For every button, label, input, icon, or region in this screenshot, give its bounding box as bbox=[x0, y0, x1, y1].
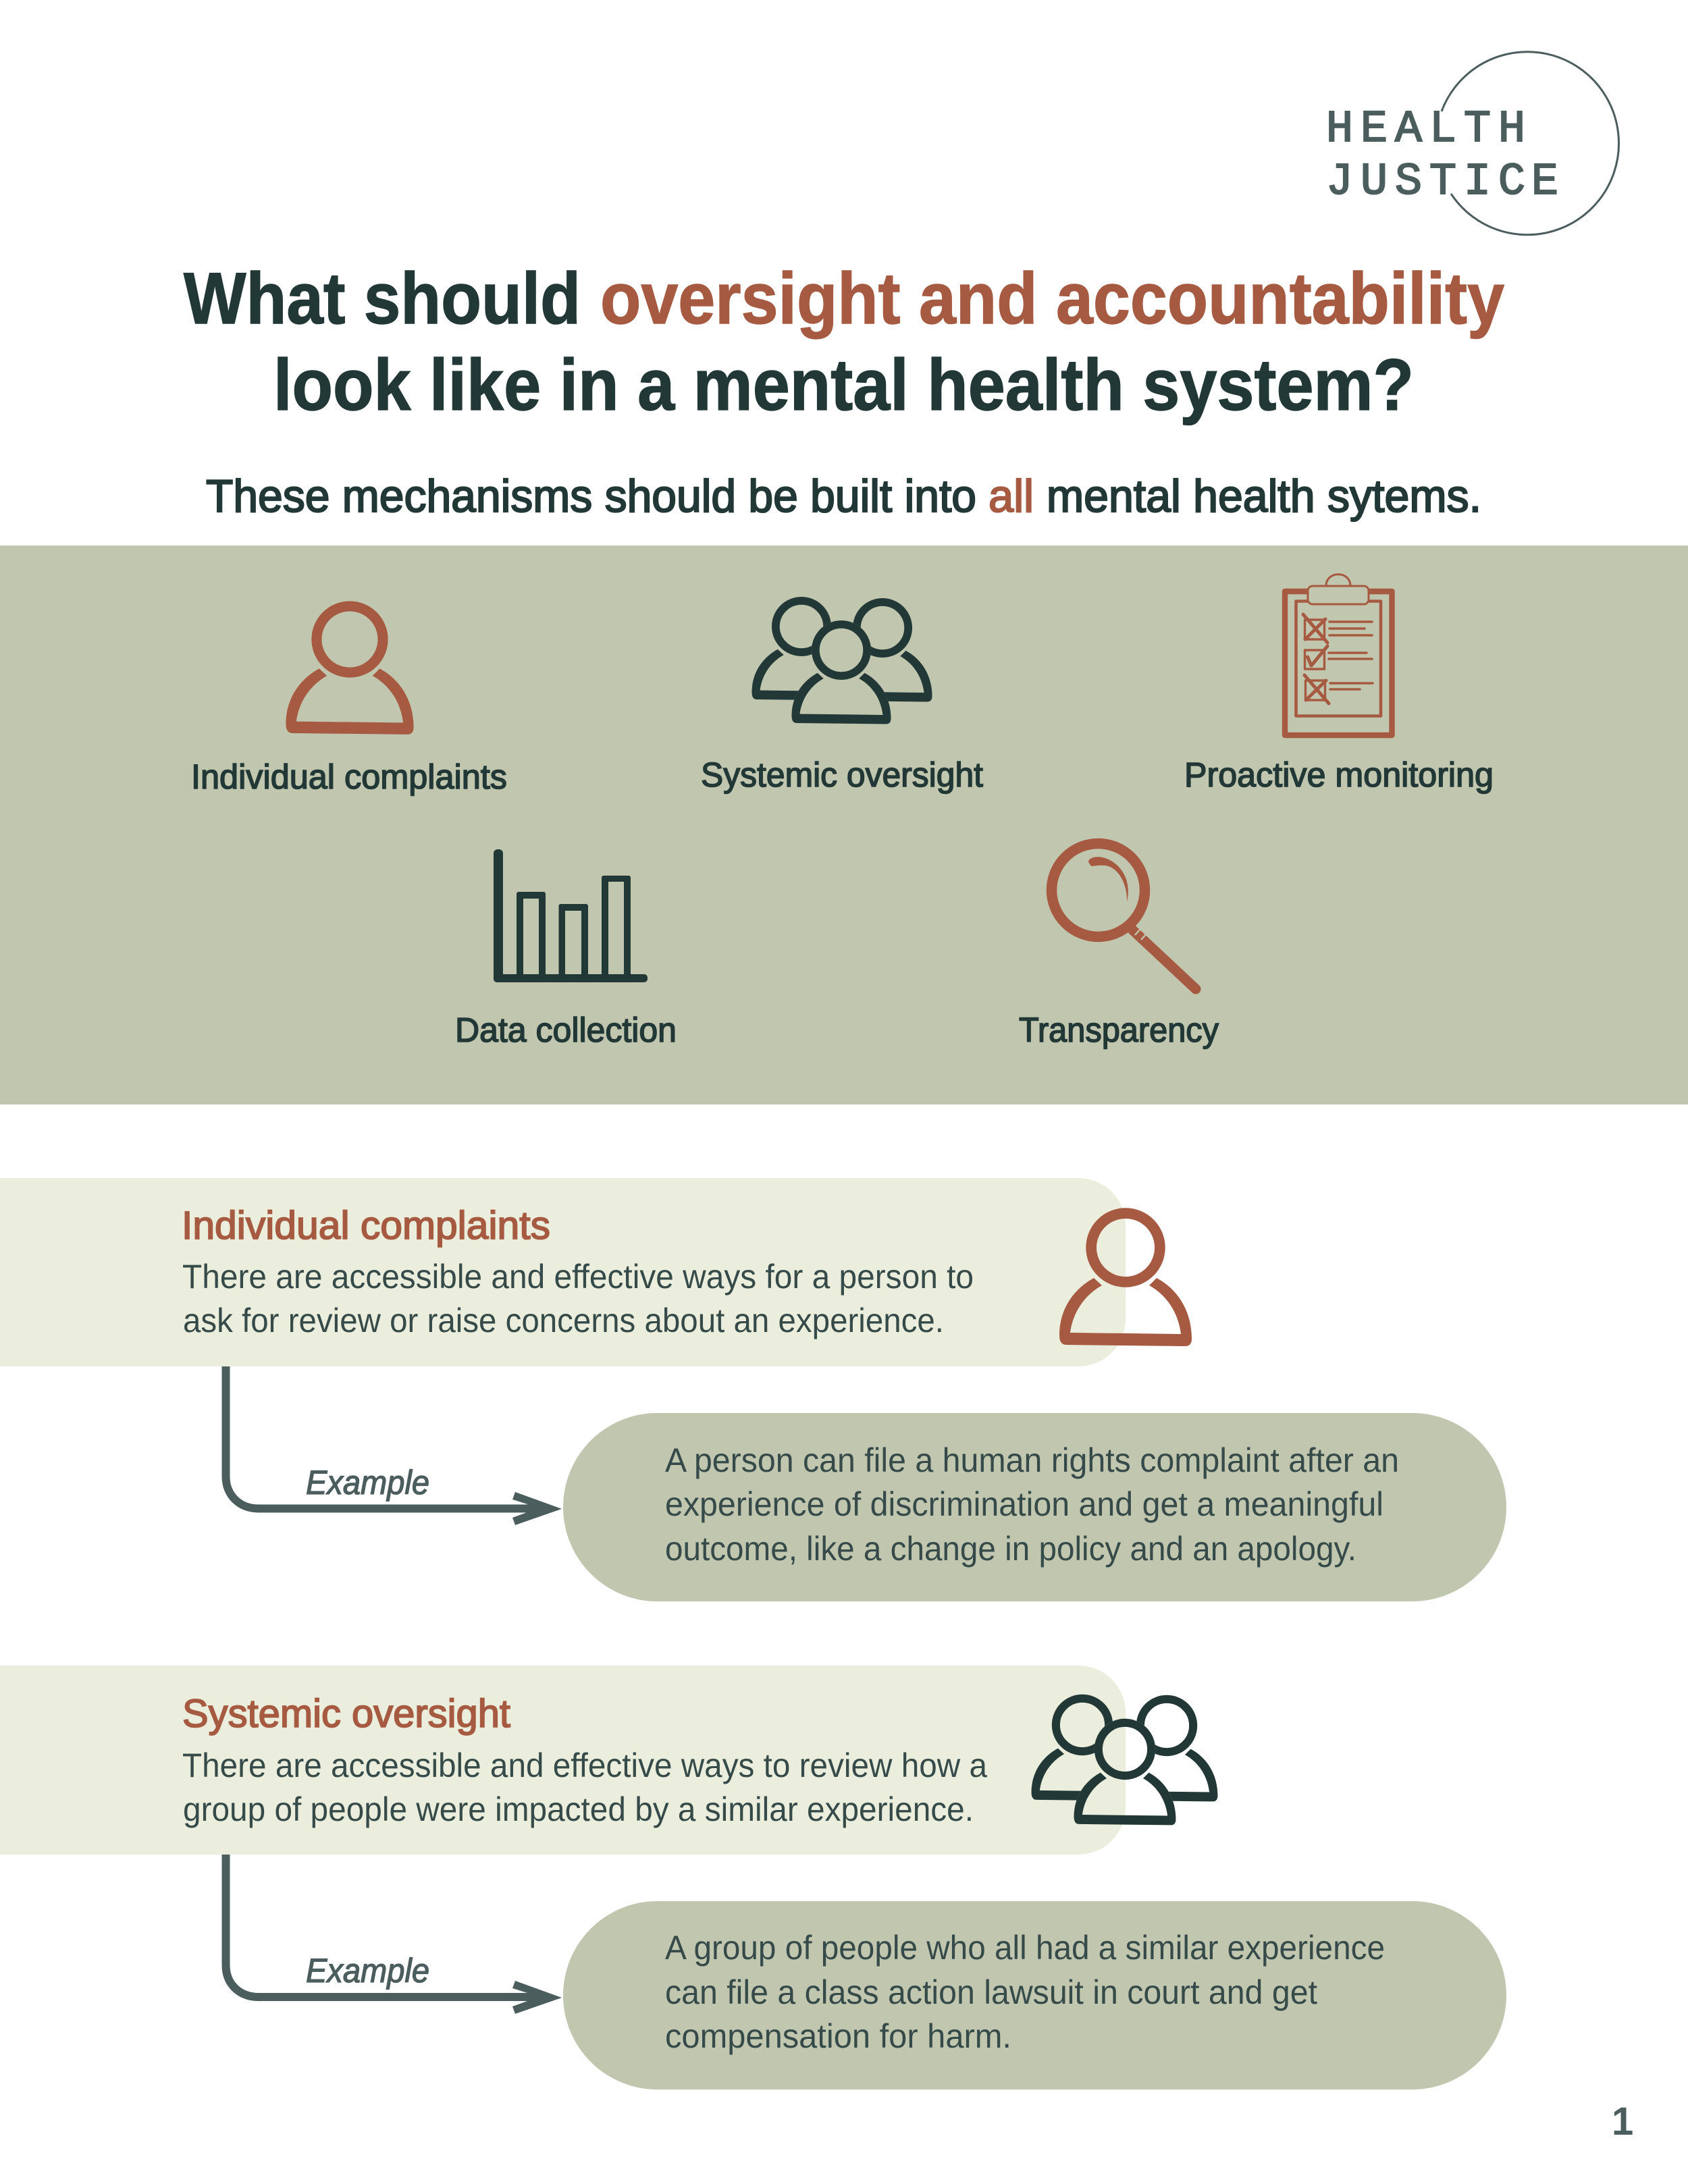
text: systemic oversight definition bbox=[182, 1747, 987, 1828]
text: individual complaints example: outcome, like a change in policy and an apology. bbox=[665, 1530, 1356, 1568]
logo: Health Justice: JUSTICE bbox=[1326, 157, 1558, 208]
text: systemic oversight example bbox=[665, 1929, 1385, 2055]
panel: individual complaints definition bbox=[0, 1178, 1126, 1366]
subtitle: all bbox=[988, 471, 1034, 522]
heading: individual complaints: Individual complaints bbox=[182, 1204, 550, 1248]
icon: individual person bbox=[286, 606, 414, 735]
text: systemic oversight definition: There are accessible and effective ways to review how a bbox=[182, 1747, 987, 1784]
text: individual complaints definition: There are accessible and effective ways for a person to bbox=[182, 1258, 974, 1296]
text: systemic oversight definition: group of people were impacted by a similar experience. bbox=[183, 1790, 974, 1828]
icon: group of people bbox=[752, 601, 932, 724]
text: systemic oversight example: compensation for harm. bbox=[665, 2017, 1011, 2055]
icon: magnifying glass bbox=[1052, 844, 1196, 989]
subtitle bbox=[206, 471, 1481, 522]
label: proactive monitoring: Proactive monitoring bbox=[1184, 755, 1494, 794]
logo: Health Justice bbox=[1326, 52, 1619, 235]
panel: systemic oversight example bbox=[563, 1901, 1506, 2089]
label: individual complaints: Individual complaints bbox=[191, 757, 507, 796]
text: systemic oversight example: can file a class action lawsuit in court and get bbox=[665, 1973, 1317, 2011]
subtitle: These mechanisms should be built into bbox=[206, 471, 976, 522]
text: individual complaints definition bbox=[182, 1258, 974, 1339]
text: individual complaints example: A person can file a human rights complaint after an bbox=[665, 1441, 1399, 1479]
title: What should bbox=[184, 257, 581, 339]
text: individual complaints definition: ask for review or raise concerns about an experience. bbox=[183, 1302, 944, 1339]
page number: 1 bbox=[1612, 2100, 1633, 2143]
label: example one: Example bbox=[306, 1464, 429, 1501]
text: individual complaints example bbox=[665, 1441, 1399, 1568]
arrow: example connector one bbox=[226, 1366, 562, 1525]
heading: systemic oversight: Systemic oversight bbox=[182, 1692, 510, 1736]
label: data collection: Data collection bbox=[455, 1011, 677, 1049]
panel: systemic oversight definition bbox=[0, 1666, 1126, 1855]
logo: Health Justice: HEALTH bbox=[1326, 104, 1525, 155]
icon: individual person large bbox=[1059, 1213, 1192, 1346]
subtitle: mental health sytems. bbox=[1047, 471, 1481, 522]
arrow: example connector two bbox=[226, 1855, 562, 2014]
panel: individual complaints example bbox=[563, 1413, 1506, 1601]
label: transparency: Transparency bbox=[1019, 1011, 1219, 1049]
title bbox=[184, 257, 1504, 425]
icon: clipboard checklist bbox=[1285, 575, 1392, 735]
title: oversight and accountability bbox=[600, 257, 1504, 339]
icon: group of people large bbox=[1032, 1699, 1217, 1825]
label: systemic oversight: Systemic oversight bbox=[701, 755, 983, 794]
panel: five mechanisms band bbox=[0, 545, 1688, 1104]
icon: bar chart bbox=[494, 849, 648, 982]
text: systemic oversight example: A group of people who all had a similar experience bbox=[665, 1929, 1385, 1967]
title: look like in a mental health system? bbox=[273, 344, 1414, 425]
label: example two: Example bbox=[306, 1952, 429, 1990]
text: individual complaints example: experience of discrimination and get a meaningful bbox=[665, 1485, 1383, 1523]
